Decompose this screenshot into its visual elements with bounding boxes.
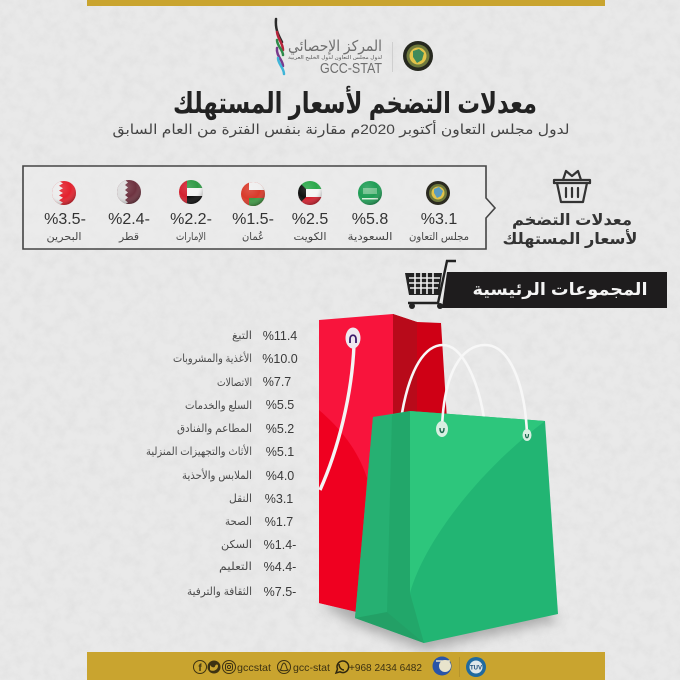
- label: Saudi Arabia: السعودية: [348, 231, 392, 243]
- row: transport: [229, 492, 293, 506]
- row: housing: السكن: [221, 539, 252, 551]
- green bag right eyelet: [522, 429, 532, 441]
- value: Oman: %1.5-: [232, 211, 274, 228]
- subtitle: لدول مجلس التعاون أكتوبر 2020م مقارنة بنفس الفترة من العام السابق: [112, 120, 570, 138]
- row: furniture: الأثاث والتجهيزات المنزلية: [146, 444, 252, 458]
- row: culture and recreation: %7.5-: [264, 585, 296, 599]
- front handle: [442, 345, 527, 434]
- icon: twitter: [208, 660, 220, 674]
- row: transport: %3.1: [265, 492, 293, 506]
- top gold bar: [87, 0, 605, 6]
- flag: Oman: [241, 182, 265, 206]
- red bag handle: [320, 345, 354, 490]
- row: tobacco: التبغ: [232, 330, 252, 342]
- logo subtitle: لدول مجلس التعاون لدول الخليج العربية: [288, 55, 383, 61]
- label: Oman: عُمان: [242, 231, 264, 243]
- icon: instagram: [222, 660, 236, 674]
- row: food and beverages: %10.0: [262, 352, 298, 366]
- green shopping bag: [355, 345, 558, 643]
- flag: Qatar: [117, 180, 141, 204]
- icon: whatsapp: [336, 661, 349, 673]
- icon: shopping basket: [554, 171, 590, 202]
- row: tobacco: [232, 329, 297, 343]
- row: restaurants and hotels: [177, 422, 294, 436]
- main groups list: [146, 329, 298, 599]
- logo latin name: GCC-STAT: [320, 61, 382, 77]
- footer bar: [87, 652, 605, 680]
- section header text: المجموعات الرئيسية: [472, 280, 648, 300]
- logo arabic name: المركز الإحصائي: [288, 38, 382, 56]
- icon: facebook: [194, 660, 206, 674]
- row: health: الصحة: [225, 516, 252, 528]
- row: clothing and footwear: الملابس والأحذية: [182, 468, 252, 482]
- row: education: التعليم: [219, 561, 252, 573]
- panel: country inflation rates: [23, 166, 495, 249]
- label: Qatar: قطر: [118, 231, 139, 243]
- flag: Bahrain: [52, 181, 76, 205]
- row: clothing and footwear: [182, 468, 294, 483]
- side heading: [502, 212, 638, 248]
- value: GCC: %3.1: [421, 211, 457, 228]
- row: food and beverages: الأغذية والمشروبات: [173, 351, 252, 365]
- phone number: +968 2434 6482: [349, 663, 422, 674]
- row: communications: الاتصالات: [217, 377, 252, 389]
- icon: facebook: f: [198, 663, 202, 674]
- flag: GCC: [426, 181, 450, 205]
- label: GCC: مجلس التعاون: [409, 231, 469, 243]
- row: goods and services: [185, 398, 294, 412]
- row: transport: النقل: [229, 493, 252, 505]
- row: culture and recreation: [187, 585, 296, 599]
- logo: GCC-STAT: [276, 19, 393, 77]
- row: health: [225, 515, 293, 529]
- handle: gcc-stat: gcc-stat: [293, 662, 330, 674]
- section header bar: [442, 272, 667, 308]
- row: clothing and footwear: %4.0: [266, 469, 294, 483]
- flag: Kuwait: [298, 181, 322, 205]
- flag: Saudi Arabia: [358, 181, 382, 205]
- row: restaurants and hotels: المطاعم والفنادق: [177, 423, 252, 435]
- row: housing: [221, 538, 296, 552]
- row: restaurants and hotels: %5.2: [266, 422, 294, 436]
- callout box with arrow: [23, 166, 495, 249]
- row: culture and recreation: الثقافة والترفية: [187, 586, 252, 598]
- icon: GCC emblem: [403, 41, 433, 71]
- row: furniture: [146, 444, 294, 459]
- value: Qatar: %2.4-: [108, 211, 150, 228]
- logo: TUV: [466, 657, 486, 677]
- value: UAE: %2.2-: [170, 211, 212, 228]
- red shopping bag: [319, 314, 447, 612]
- row: tobacco: %11.4: [263, 329, 297, 343]
- value: Bahrain: %3.5-: [44, 211, 86, 228]
- row: food and beverages: [173, 351, 298, 366]
- value: Kuwait: %2.5: [292, 211, 328, 228]
- bag shadow: [318, 600, 560, 650]
- icon: ribbon wing: [276, 19, 284, 74]
- red bag eyelet: [346, 328, 360, 348]
- label: UAE: الإمارات: [176, 231, 206, 243]
- label: Bahrain: البحرين: [46, 231, 82, 243]
- row: furniture: %5.1: [266, 445, 294, 459]
- logo: certification mark: [432, 656, 452, 676]
- value: Saudi Arabia: %5.8: [352, 211, 388, 228]
- side heading line 2: لأسعار المستهلك: [502, 229, 638, 248]
- back handles of green bag: [402, 345, 484, 418]
- icon: snapchat: [278, 660, 290, 674]
- title: معدلات التضخم لأسعار المستهلك: [173, 85, 537, 120]
- handle: gccstat: gccstat: [237, 662, 271, 674]
- row: education: [219, 560, 296, 574]
- logo: TUV: TUV: [470, 666, 482, 672]
- side heading line 1: معدلات التضخم: [512, 212, 632, 229]
- row: goods and services: السلع والخدمات: [185, 400, 252, 412]
- row: communications: [217, 375, 291, 389]
- row: health: %1.7: [265, 515, 293, 529]
- flag: UAE: [179, 180, 203, 204]
- green bag left eyelet: [436, 421, 448, 437]
- label: Kuwait: الكويت: [294, 231, 326, 243]
- row: goods and services: %5.5: [266, 398, 294, 412]
- row: communications: %7.7: [263, 375, 291, 389]
- row: education: %4.4-: [264, 560, 296, 574]
- row: housing: %1.4-: [264, 538, 296, 552]
- icon: shopping cart: [405, 261, 456, 309]
